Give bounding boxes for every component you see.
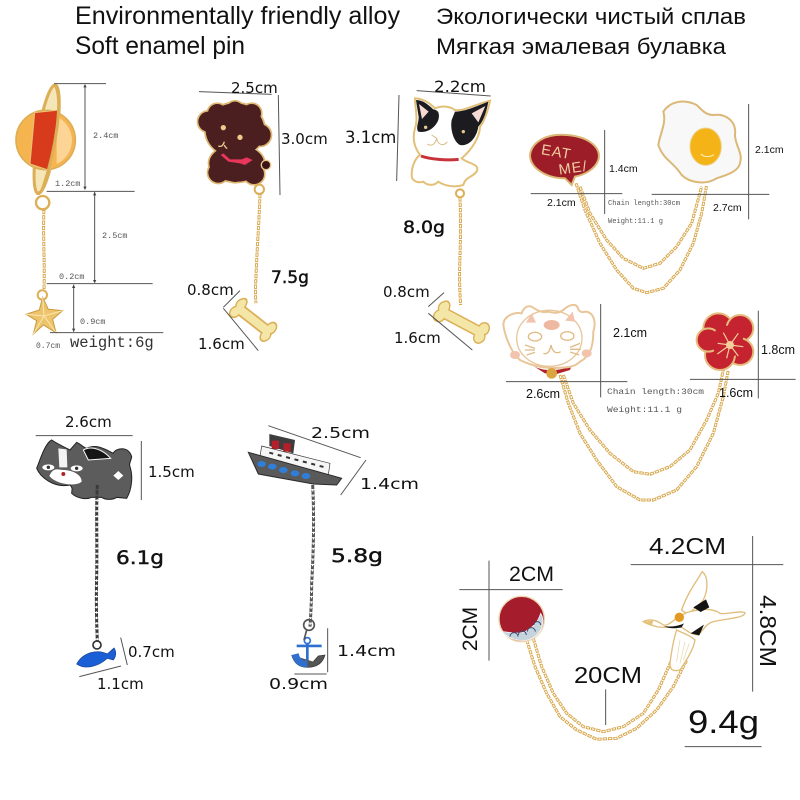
measurements: 1.2cm bbox=[55, 179, 81, 189]
panel: ship pin bbox=[248, 424, 419, 693]
measurements: 0.7cm bbox=[128, 643, 175, 661]
dimension lines bbox=[506, 304, 796, 398]
measurements: 2.6cm bbox=[526, 387, 560, 401]
title: English bbox=[75, 2, 400, 60]
measurements bbox=[65, 413, 195, 693]
measurements bbox=[345, 77, 486, 347]
measurements: 1.4cm bbox=[609, 163, 638, 175]
measurements: Weight:11.1 g bbox=[608, 218, 663, 226]
measurements bbox=[187, 79, 328, 353]
dimension lines bbox=[36, 436, 141, 677]
measurements: 7.5g bbox=[271, 268, 309, 288]
measurements: 2.6cm bbox=[65, 413, 112, 431]
measurements: 1.5cm bbox=[148, 463, 195, 481]
icon: speech bubble and fried egg joined by chains: ME/ bbox=[558, 159, 589, 179]
icon: cat and plum blossom joined by chains bbox=[503, 305, 753, 500]
panel: sun and crane pins bbox=[459, 533, 783, 747]
measurements: 2.1cm bbox=[755, 144, 784, 156]
measurements: 2.7cm bbox=[713, 202, 742, 214]
icon: bulldog with bone charm bbox=[412, 98, 492, 345]
measurements: 0.9cm bbox=[80, 317, 106, 327]
panel: planet pin bbox=[16, 84, 163, 352]
dimension lines bbox=[199, 92, 280, 351]
measurements bbox=[526, 326, 795, 415]
measurements: Weight:11.1 g bbox=[607, 406, 682, 415]
dimension lines bbox=[531, 104, 769, 219]
icon: sun with waves and crane joined by chains bbox=[499, 572, 745, 739]
measurements: 1.8cm bbox=[761, 343, 795, 357]
measurements: 4.8CM bbox=[755, 595, 781, 667]
panel: poodle pin bbox=[187, 79, 328, 353]
measurements: 4.2CM bbox=[649, 533, 726, 559]
measurements: 0.2cm bbox=[59, 272, 85, 282]
measurements: 6.1g bbox=[116, 547, 164, 569]
icon: speech bubble and fried egg joined by chains bbox=[530, 102, 741, 293]
measurements: 0.9cm bbox=[269, 675, 328, 693]
icon: speech bubble and fried egg joined by chains: EAT bbox=[540, 142, 573, 163]
measurements: 1.6cm bbox=[719, 386, 753, 400]
measurements: 1.6cm bbox=[394, 329, 441, 347]
measurements: 9.4g bbox=[688, 704, 759, 740]
measurements bbox=[459, 533, 781, 740]
measurements: 20CM bbox=[574, 662, 642, 688]
measurements: 2.2cm bbox=[434, 77, 486, 96]
measurements: 2.4cm bbox=[93, 131, 119, 141]
dimension lines bbox=[397, 91, 491, 350]
measurements: 0.8cm bbox=[383, 283, 430, 301]
measurements: Chain length:30cm bbox=[608, 200, 680, 208]
dimension lines bbox=[47, 84, 163, 333]
icon: planet with star charm bbox=[16, 84, 75, 334]
measurements: 5.8g bbox=[331, 545, 383, 567]
title: English: Environmentally friendly alloy bbox=[75, 2, 400, 30]
measurements: weight:6g bbox=[70, 334, 154, 352]
icon: poodle with bone charm bbox=[198, 102, 279, 343]
measurements: 1.6cm bbox=[198, 335, 245, 353]
dimension lines bbox=[459, 536, 783, 747]
panel: bulldog pin bbox=[345, 77, 492, 350]
panel: speech bubble and egg pins bbox=[530, 102, 784, 293]
measurements: Chain length:30cm bbox=[607, 388, 704, 397]
measurements: 2.5cm bbox=[311, 424, 370, 442]
title: Russian: Экологически чистый сплав bbox=[436, 4, 746, 29]
measurements: 2CM bbox=[509, 563, 554, 586]
measurements: 3.0cm bbox=[281, 130, 328, 148]
title: Russian: Мягкая эмалевая булавка bbox=[436, 34, 727, 59]
panel: cat and flower pins bbox=[503, 304, 796, 500]
icon: dark cat with fish charm bbox=[37, 440, 132, 667]
icon: ship with anchor charm bbox=[248, 434, 342, 667]
measurements: 1.4cm bbox=[360, 475, 419, 493]
measurements bbox=[547, 144, 784, 226]
title: English: Soft enamel pin bbox=[75, 32, 245, 60]
measurements bbox=[36, 131, 154, 352]
measurements: 2.1cm bbox=[613, 326, 647, 340]
dimension lines bbox=[268, 426, 366, 674]
measurements: 2.1cm bbox=[547, 197, 576, 209]
measurements: 2.5cm bbox=[231, 79, 278, 97]
title: Russian bbox=[436, 4, 746, 59]
measurements: 8.0g bbox=[403, 218, 445, 238]
measurements: 1.4cm bbox=[337, 642, 396, 660]
measurements bbox=[269, 424, 419, 693]
measurements: 0.7cm bbox=[36, 342, 60, 351]
measurements: 2.5cm bbox=[102, 231, 128, 241]
measurements: 0.8cm bbox=[187, 281, 234, 299]
measurements: 3.1cm bbox=[345, 128, 396, 147]
panel: dark cat pin bbox=[36, 413, 195, 693]
measurements: 1.1cm bbox=[97, 675, 144, 693]
measurements: 2CM bbox=[459, 607, 482, 651]
